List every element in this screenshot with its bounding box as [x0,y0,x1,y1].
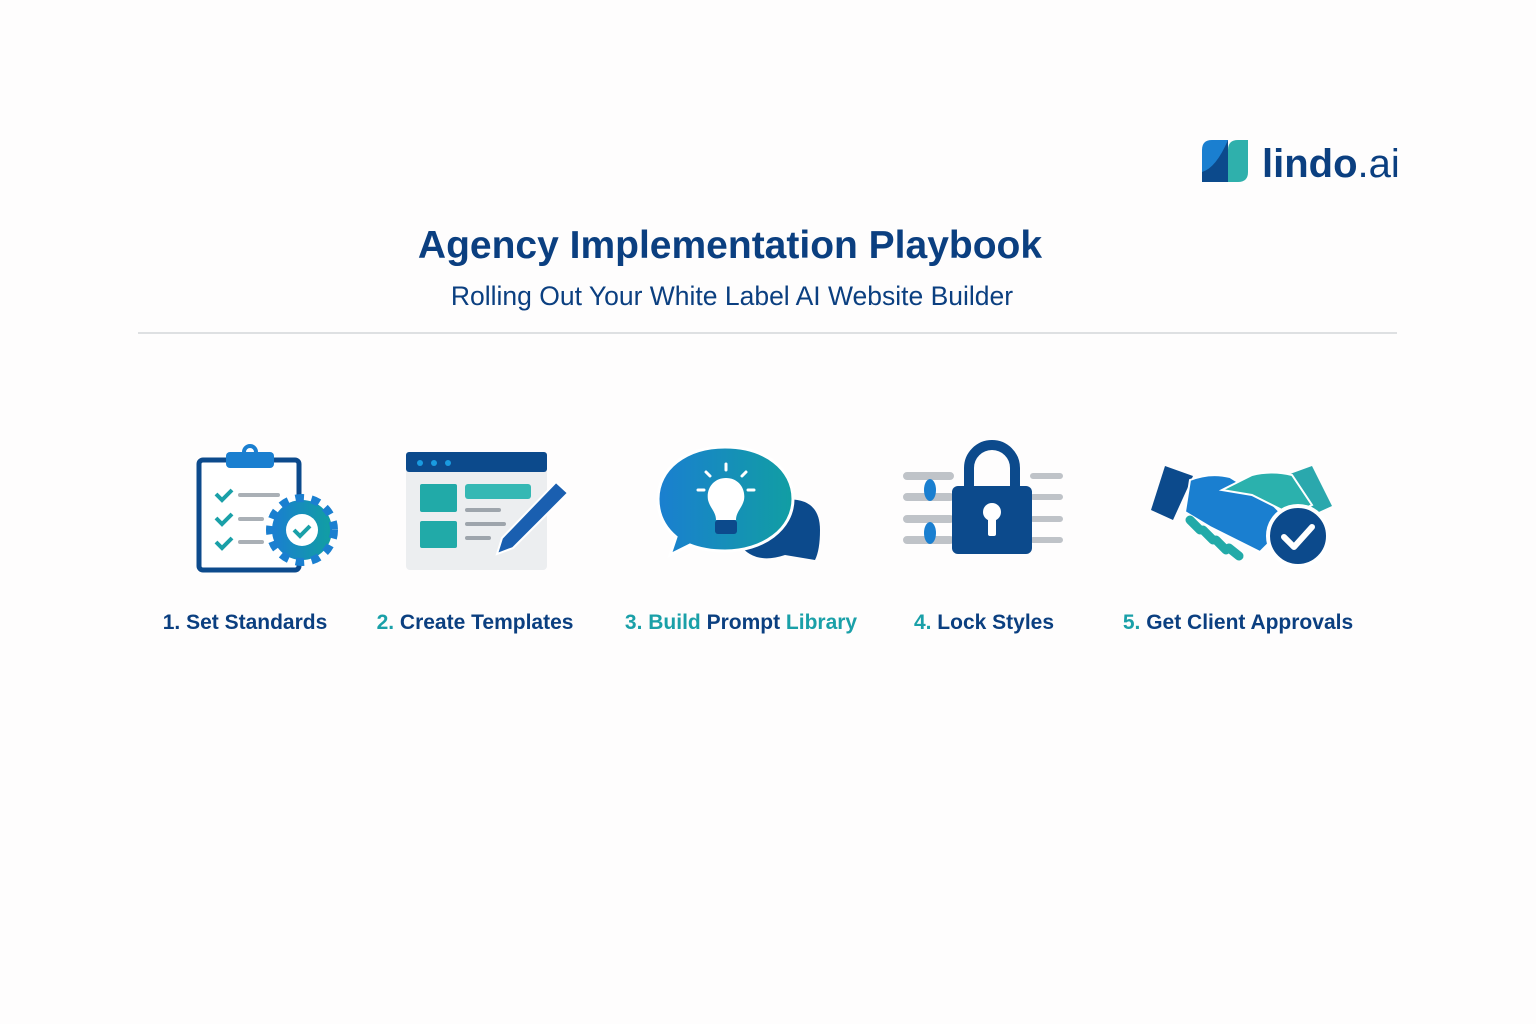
subtitle: Rolling Out Your White Label AI Website Builder [451,281,1013,311]
icon: handshake with check [1151,466,1332,566]
label: 1. Set Standards: 1. Set Standards [163,611,327,634]
icon: clipboard with gear [199,446,332,570]
label: 2. Create Templates: 2. Create Templates [377,611,573,634]
label: 5. Get Client Approvals: 5. Get Client Approvals [1123,611,1353,634]
title: Agency Implementation Playbook [418,224,1042,267]
label: 3. Build Prompt Library: 3. Build Prompt Library [625,611,857,634]
logo: lindo.ai: lindo.ai [1262,142,1400,186]
icon: template window with pencil [406,452,568,570]
icon: padlock with sliders [907,445,1060,554]
logo: lindo.ai [1202,140,1400,186]
icon: speech bubbles with lightbulb [658,447,820,560]
label: 4. Lock Styles: 4. Lock Styles [914,611,1054,634]
